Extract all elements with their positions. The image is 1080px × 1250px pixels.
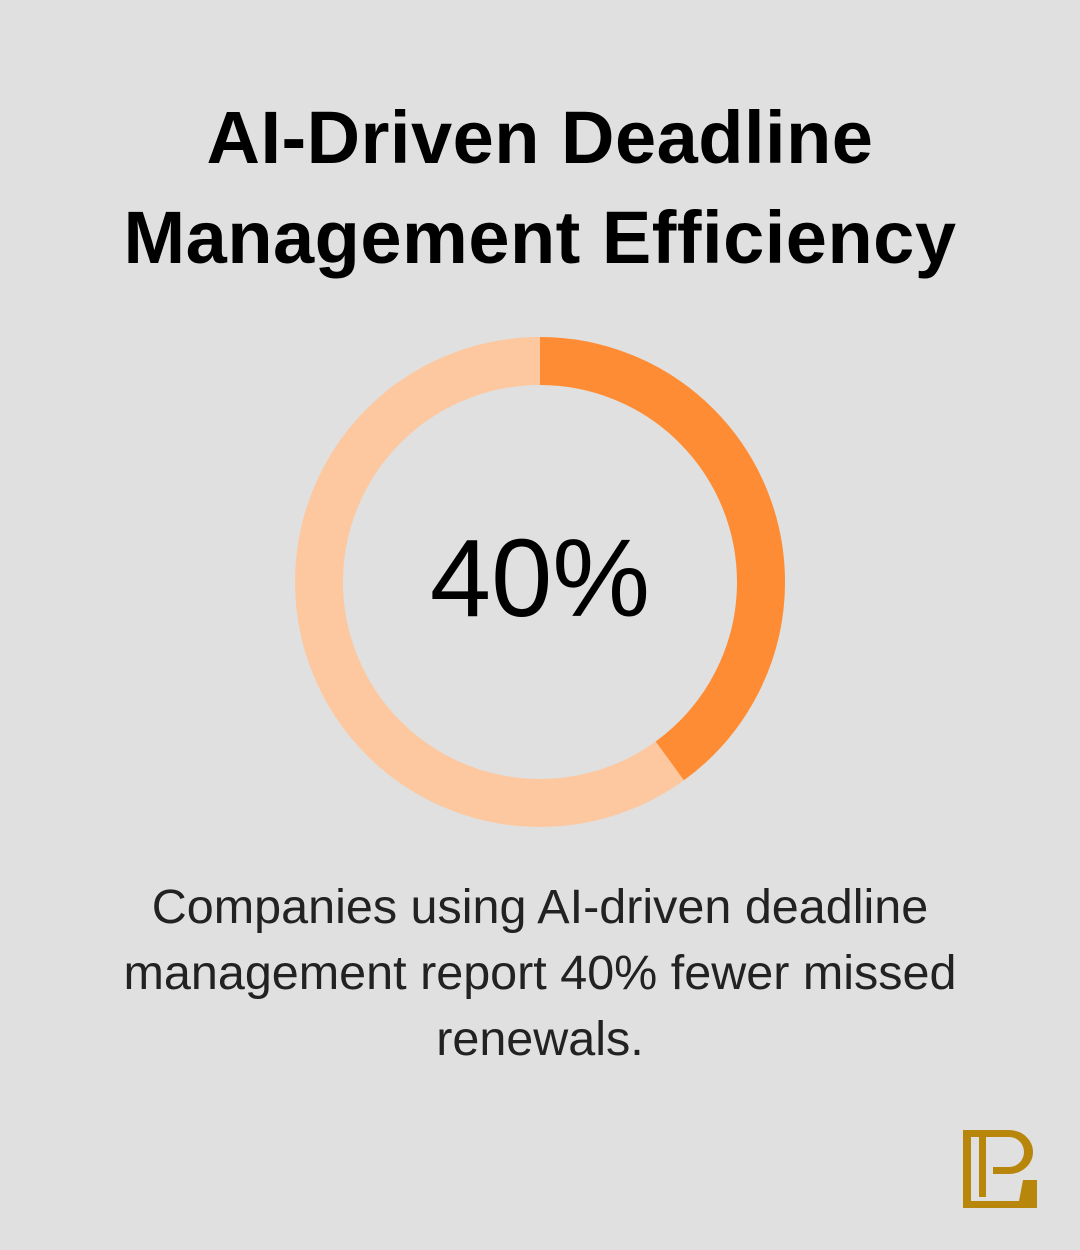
title bbox=[124, 96, 956, 279]
caption bbox=[124, 880, 956, 1066]
caption: Companies using AI-driven deadline bbox=[152, 880, 928, 934]
title: AI-Driven Deadline bbox=[207, 96, 873, 179]
title: Management Efficiency bbox=[124, 196, 956, 279]
caption: renewals. bbox=[436, 1012, 644, 1066]
caption: management report 40% fewer missed bbox=[124, 946, 956, 1000]
donut chart: 40% bbox=[430, 517, 650, 640]
icon: logo bbox=[963, 1130, 1037, 1208]
